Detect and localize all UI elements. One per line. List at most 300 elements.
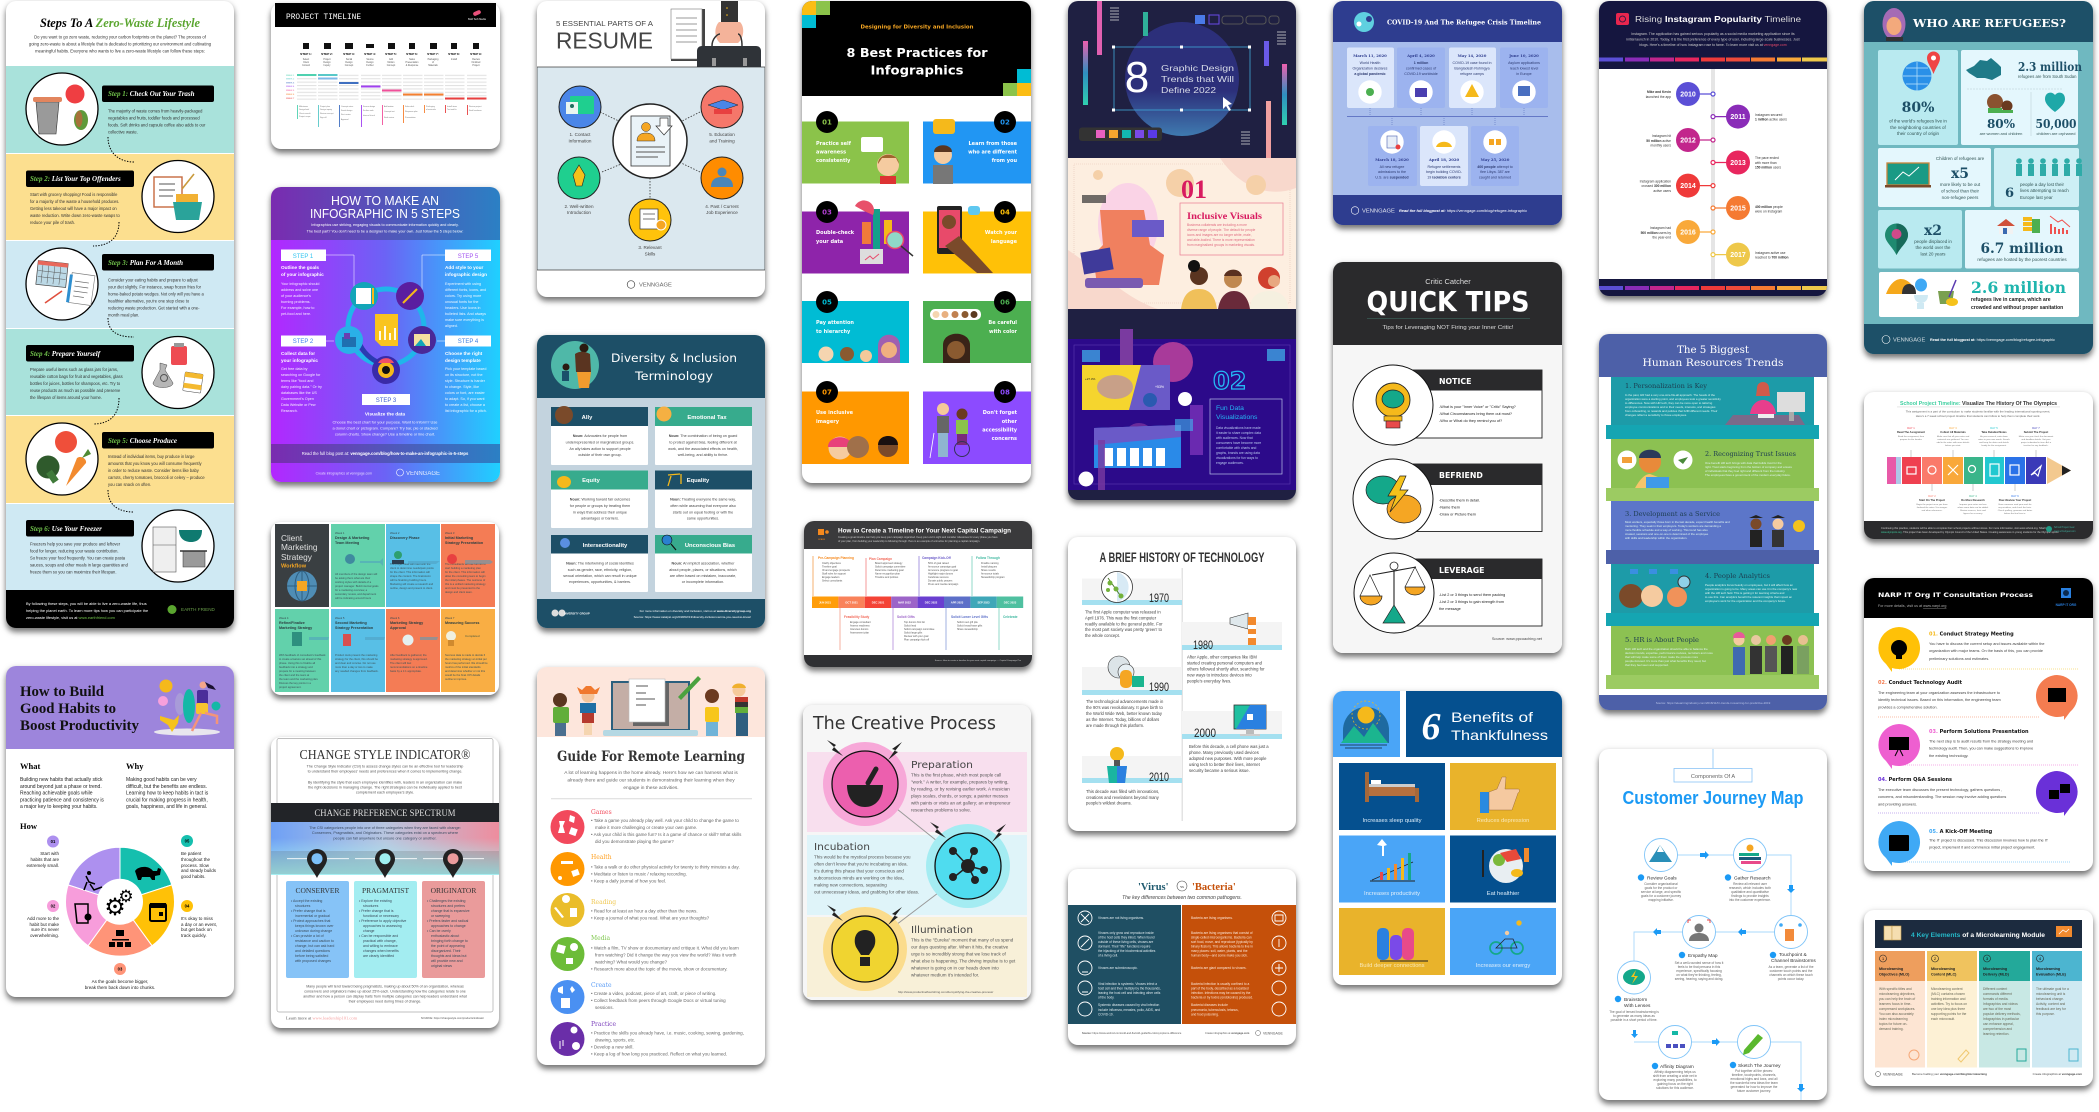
panel: NARP consultation process: provides a comprehensive solution. bbox=[1878, 706, 1938, 710]
panel: diversity and inclusion bbox=[537, 335, 765, 628]
step circles bbox=[26, 73, 214, 582]
title: Terminology bbox=[634, 369, 713, 383]
comparison text: host cell and then multiply by the thousands, bbox=[1098, 986, 1161, 990]
practice labels: language bbox=[991, 239, 1018, 245]
term cards: Noun: An implicit association, whether bbox=[672, 562, 735, 566]
year nodes bbox=[1688, 92, 1738, 257]
week cards: to create a feature set ahead of this bbox=[279, 657, 322, 661]
stat text: the neighboring countries of bbox=[1890, 125, 1947, 130]
activity lists: • Meditate or listen to music / relaxing recording. bbox=[591, 872, 687, 876]
columns: Evaluation (MLE) bbox=[2036, 972, 2067, 976]
category boxes: • Prefers faster and radical bbox=[427, 919, 469, 923]
title: The best part? You don't need to be a designer to make your own. Just follow the 5 steps below: bbox=[307, 230, 463, 234]
title: HOW TO MAKE AN bbox=[331, 193, 439, 208]
day notes: As you research, write down bbox=[1980, 435, 2009, 438]
comparison text: of the host cells they infect. When found bbox=[1098, 936, 1155, 940]
stat boxes bbox=[1878, 50, 2079, 317]
category boxes: • Explore the existing bbox=[359, 899, 392, 903]
milestone notes: of materials bbox=[426, 108, 436, 111]
panel: creative process: whatever is going on in our heads down into bbox=[911, 966, 999, 970]
panel: resume bbox=[537, 1, 765, 297]
step body text: bottles for juices, bottles for shampoos, etc. Try to bbox=[30, 381, 121, 386]
gantt grid: WEEK 1 bbox=[286, 75, 295, 77]
panel: creative process: This is the first phase, which most people call bbox=[911, 772, 1001, 778]
step text: Research. bbox=[281, 409, 298, 413]
panel: instagram timeline: 2011 bbox=[1730, 114, 1746, 121]
columns: Activity, content and bbox=[2036, 1002, 2065, 1006]
step text: Your infographic should bbox=[281, 282, 319, 286]
category boxes: and willing to embrace bbox=[363, 944, 398, 948]
step labels: into the customer experience. bbox=[1729, 898, 1771, 902]
milestone notes: Response plan bbox=[405, 111, 418, 113]
day notes: DAY 6 bbox=[2011, 494, 2019, 498]
panel: instagram timeline: 2016 bbox=[1680, 230, 1696, 236]
week cards: phase. Using this to finalize all bbox=[279, 661, 316, 665]
columns: each microvault. bbox=[1931, 1017, 1955, 1021]
week cards: Team Meeting bbox=[335, 541, 359, 545]
step columns: STEP 4: bbox=[364, 52, 376, 56]
step labels: Brainstorm bbox=[1624, 997, 1647, 1003]
phases: Timeline goal bbox=[822, 566, 837, 568]
step body text: Prepare useful items such as glass jars for jams, bbox=[30, 367, 118, 372]
activity lists: • Ask your child is this game fun? Is it a game of chance or skill? What skills bbox=[591, 832, 742, 837]
header bbox=[1882, 8, 2066, 41]
step text: style. Structure is harder bbox=[445, 379, 486, 383]
milestone notes: Design inquiry bbox=[320, 108, 332, 111]
term cards: Noun: Advocates for people from bbox=[573, 434, 627, 438]
header: COVID-19 And The Refugee Crisis Timeline bbox=[1387, 18, 1541, 26]
event text: June 10, 2020 bbox=[1508, 53, 1539, 58]
milestone notes: Review project bbox=[469, 105, 482, 108]
week cards: design and client team. bbox=[445, 590, 473, 594]
step text: headers. Use icons in bbox=[445, 306, 480, 310]
title: 8 Best Practices for bbox=[846, 45, 988, 60]
step text: databases like the US bbox=[281, 391, 317, 395]
panel: creative process: "work." A writer, for example, prepares by writing, bbox=[911, 780, 1008, 784]
step text: different fonts, icons, and bbox=[445, 288, 486, 292]
columns: (MLC) contains chosen bbox=[1931, 992, 1965, 996]
why: Why bbox=[126, 761, 144, 771]
event text: 19 isolation centers bbox=[1427, 176, 1461, 180]
gantt grid bbox=[286, 74, 486, 100]
step text: Experiment with using bbox=[445, 282, 481, 286]
step body text: home-baked potato wedges. Not only will you have a bbox=[108, 292, 205, 296]
step body text: reusable cotton bags for fruit and vegetables, glass bbox=[30, 374, 123, 379]
comparison text: Viral infection is systemic. Viruses infect a bbox=[1098, 982, 1157, 986]
title: Benefits of bbox=[1451, 709, 1533, 725]
step text: pet-food and here. bbox=[281, 312, 311, 316]
step labels: the wonderful new ideas the team bbox=[1730, 1081, 1778, 1085]
footer bbox=[552, 609, 751, 619]
era text: This decade was filled with innovations, bbox=[1086, 789, 1159, 794]
panel: HR trends: to use this. Can analytics benefit the relevant insights that impact an bbox=[1705, 595, 1792, 599]
part icons bbox=[558, 86, 743, 241]
year notes: were on Instagram bbox=[1755, 210, 1783, 214]
practice labels: consistently bbox=[816, 158, 851, 164]
practice labels bbox=[816, 141, 1018, 442]
phases: Celebrate success bbox=[928, 576, 949, 579]
number badges: 02 bbox=[1000, 118, 1010, 126]
title: 5 ESSENTIAL PARTS OF A bbox=[556, 21, 653, 28]
week cards: After feedback is gathered, the bbox=[390, 653, 427, 657]
category boxes bbox=[286, 881, 485, 978]
panel: HR trends: employee communications and to their needs, interests, and strategies bbox=[1625, 405, 1716, 409]
columns: 4 bbox=[2039, 957, 2041, 961]
activity lists: • Take a walk or do other physical activity for twenty to thirty minutes a day. bbox=[591, 864, 740, 870]
stat text: lives attempting to reach bbox=[2020, 188, 2069, 193]
week cards: Week 7 bbox=[445, 616, 455, 620]
step text: list infographic for a pitch. bbox=[445, 409, 487, 413]
panel: creative process: This is the "Eureka" moment that many of us spend bbox=[911, 938, 1014, 942]
footer: www.schoolgear.com bbox=[2054, 530, 2076, 533]
panel: creative process bbox=[803, 705, 1031, 1000]
term cards: An ally takes action to support people bbox=[569, 447, 631, 451]
step text: Get free data by bbox=[281, 367, 308, 371]
milestone notes: Presentation bbox=[405, 116, 416, 119]
footer: Continuing this practice, students will be able to complete their school projects without stress. For more information, visit www.school.org. Sharing is bbox=[1881, 526, 2051, 530]
practice labels: to hierarchy bbox=[816, 329, 851, 335]
footer: Create infographics at venngage.com bbox=[2033, 1072, 2082, 1076]
heading bbox=[1622, 749, 1804, 808]
stat text: x2 bbox=[1924, 223, 1942, 239]
step text: a donut chart or pictogram. Compare? Try bar, pie or stacked bbox=[332, 426, 438, 430]
data visualizations section: Visualizations bbox=[1216, 414, 1258, 421]
panel: HR trends: changes reflect a sensitivity to those employees. bbox=[1625, 413, 1687, 417]
flow path bbox=[1634, 855, 1801, 1100]
step body text: Instead of individual items, buy produce in large bbox=[108, 454, 195, 459]
tip boxes: the message bbox=[1439, 607, 1461, 611]
logo: earth friend bbox=[168, 605, 216, 614]
step text: to change. Style, like bbox=[445, 385, 479, 389]
step columns: Design bbox=[366, 62, 374, 64]
event text: COVID-19 case found in bbox=[1453, 61, 1491, 65]
phases: Feasibility Study bbox=[844, 615, 870, 619]
title: Critic Catcher bbox=[1425, 277, 1471, 286]
step labels: points occur today. bbox=[1778, 977, 1804, 981]
practice labels: Be careful bbox=[988, 320, 1017, 326]
phases: Solicit campaign committee bbox=[875, 566, 906, 568]
category boxes: bringing forth change to bbox=[431, 939, 468, 943]
panel: instagram timeline: 2013 bbox=[1730, 160, 1746, 167]
week cards: Week 6 bbox=[390, 616, 400, 620]
footer bbox=[1351, 207, 1527, 214]
stat text: refugees are from South Sudan bbox=[2018, 74, 2077, 79]
day notes: Read The Assignment bbox=[1897, 430, 1925, 434]
week cards: strategy for the client, this should be bbox=[335, 657, 379, 661]
columns bbox=[1875, 951, 2082, 1068]
panel: HR trends: employee's work for the organization and the company's future. bbox=[1705, 599, 1786, 603]
phases: ID and engage prospects bbox=[822, 569, 851, 572]
columns: Delivery (MLD) bbox=[1983, 972, 2010, 976]
category boxes: • Can be overly bbox=[427, 929, 451, 933]
intro: This assignment is a part of the curriculum to make students familiar with the leading international sporting event. bbox=[1906, 410, 2050, 414]
day notes: DAY 2 bbox=[1928, 494, 1936, 498]
step columns: STEP 3: bbox=[343, 52, 355, 56]
runner illustration bbox=[154, 680, 220, 736]
hero title: Trends that Will bbox=[1161, 75, 1234, 84]
category boxes: • Can provide a lot of bbox=[291, 934, 324, 938]
title: The 5 Biggest bbox=[1677, 345, 1749, 356]
term cards: Noun: The intertwining of social identities bbox=[566, 562, 634, 566]
habit notes: overwhelming. bbox=[30, 933, 59, 938]
step text: infographic design bbox=[445, 272, 487, 277]
phases: 50% of goal raised bbox=[928, 562, 949, 565]
data visualizations section: Data visualizations have made bbox=[1216, 426, 1261, 430]
data visualizations section: with audiences. Now that bbox=[1216, 436, 1253, 440]
panel: NARP consultation process: The next step is to audit results from the strategy meeting and bbox=[1929, 740, 2033, 744]
intro: already there and guide our students in demonstrating their learning when they bbox=[567, 778, 735, 784]
inclusive visuals section: and able-bodied. There is more representation bbox=[1187, 238, 1255, 242]
columns: With specific titles and bbox=[1879, 987, 1912, 991]
panel: virus vs bacteria: The key differences between two common pathogens. bbox=[1122, 895, 1242, 901]
panel: virus vs bacteria: and food poisoning. bbox=[1191, 1012, 1219, 1016]
panel: HR trends: that they feel seen and supported. bbox=[1625, 663, 1669, 667]
practice labels: Double-check bbox=[816, 230, 855, 236]
header: WHO ARE REFUGEES? bbox=[1912, 16, 2066, 30]
columns: Microlearning bbox=[1879, 967, 1903, 971]
footer text: VENNGAGE bbox=[406, 471, 440, 477]
year notes: crossed 300 million bbox=[1641, 184, 1671, 188]
colored stripes bbox=[1599, 58, 1827, 290]
event text bbox=[1353, 53, 1540, 180]
footer text: Read the full blog post at: venngage.com/blog/how-to-make-an-infographic-in-5-steps bbox=[302, 451, 469, 456]
step columns: Review bbox=[472, 59, 480, 61]
panel: quick tips bbox=[1333, 262, 1562, 653]
how heading: How bbox=[20, 821, 38, 831]
event text: March 18, 2020 bbox=[1375, 157, 1409, 162]
step body text: Consider your eating habits and prepare to adjust bbox=[108, 278, 199, 282]
habit notes: a day or an event, bbox=[181, 922, 217, 927]
day notes: and keep the dates and details bbox=[1979, 441, 2010, 444]
tip boxes: -What Circumstances bring them out most? bbox=[1439, 412, 1512, 416]
panel: virus vs bacteria: sort food, move, and reproduce (typically by bbox=[1191, 940, 1253, 944]
day notes: Peer-Review Your Project bbox=[1999, 498, 2031, 502]
category boxes: original views bbox=[431, 964, 452, 968]
panel: creative process: out unnecessary ideas, and grabbing for other ideas. bbox=[814, 890, 919, 894]
era text: people's wildest dreams. bbox=[1086, 800, 1132, 806]
panel: creative process: often don't know that you're incubating an idea. bbox=[814, 862, 908, 866]
workflow title: Client bbox=[281, 533, 303, 543]
year notes: Instagram secured bbox=[1755, 113, 1782, 117]
event text: 1 million bbox=[1414, 61, 1428, 65]
week cards: the team and the marketing plan. bbox=[279, 677, 319, 681]
intro bbox=[564, 770, 738, 791]
panel: remote learning guide bbox=[537, 667, 765, 1065]
panel: HR trends: from onboarding, to rewards and policies that fulfill different needs. Their bbox=[1625, 409, 1717, 413]
category boxes: practical with change, bbox=[363, 939, 397, 943]
milestone notes: Test and fix bbox=[447, 108, 457, 111]
category boxes: change, but can ask hard bbox=[295, 944, 334, 948]
benefit tiles: Reduces depression bbox=[1477, 818, 1529, 824]
footer: VENNGAGE bbox=[1362, 208, 1395, 214]
footer text bbox=[26, 601, 148, 620]
step text bbox=[1878, 632, 2029, 835]
week cards: prepare for a meeting between bbox=[279, 669, 316, 673]
tip icons bbox=[1360, 383, 1425, 623]
week cards: more than a day or two to make bbox=[335, 665, 373, 669]
panel: NARP consultation process: project, implement it and commence initial project engagement. bbox=[1929, 846, 2035, 850]
era years: 2000 bbox=[1194, 726, 1216, 740]
panel: creative process: with paints or visits an art gallery; an entrepreneur bbox=[911, 800, 1011, 806]
week cards: any needed changes from feedback. bbox=[335, 669, 379, 673]
number badges: 07 bbox=[822, 388, 832, 396]
step text: 01. Conduct Strategy Meeting bbox=[1929, 632, 2014, 638]
step body text: So freeze your food frequently. You can create pasta bbox=[30, 556, 126, 560]
footer text: Create infographics at venngage.com bbox=[316, 472, 372, 476]
cycle diagram bbox=[326, 255, 445, 384]
panel: good habits bbox=[6, 666, 234, 997]
step body text: sauces, soups and other meals in large quantities and bbox=[30, 562, 129, 568]
panel: virus vs bacteria: Bacteria are living organisms. bbox=[1191, 916, 1233, 920]
step labels: feels to be that persona in this bbox=[1678, 965, 1721, 969]
phases: Announce campaign goal bbox=[928, 566, 957, 568]
header bbox=[818, 528, 1011, 543]
category boxes: changes when benefits bbox=[363, 949, 399, 953]
trend text: 1. Personalization is Key bbox=[1625, 383, 1708, 390]
title: Boost Productivity bbox=[20, 718, 139, 734]
event text: confirmed cases of bbox=[1406, 66, 1436, 70]
gantt grid: WEEK 7 bbox=[286, 98, 295, 100]
closing text: Many people will tend toward being pragmatists, making up about 50% of an organization, whereas bbox=[306, 984, 464, 988]
activity lists: • Practice the skills you already have, i.e. music, cooking, sewing, gardening, bbox=[591, 1030, 744, 1036]
era text: phone. Many previously used devices bbox=[1189, 750, 1259, 755]
milestone notes: Final handover bbox=[469, 109, 482, 112]
week cards: start building a marketing plan bbox=[445, 566, 481, 570]
activity lists: sessions. bbox=[595, 1005, 614, 1010]
habit notes: throughout the bbox=[181, 857, 211, 862]
title: Good Habits to bbox=[20, 701, 116, 717]
step body text: vegetables and fruits, toddler foods and processed bbox=[108, 116, 200, 120]
intro: By identifying the style that each employee identifies with, leaders in an organization can make bbox=[308, 780, 462, 784]
stat text: refugees are hosted by the poorest countries bbox=[1977, 257, 2067, 262]
footer bbox=[1881, 526, 2076, 534]
category boxes: or sweeping bbox=[431, 914, 450, 918]
panel: graphic design trends bbox=[1068, 1, 1296, 500]
intro text bbox=[29, 34, 212, 54]
step labels: shift from creating a wide net in bbox=[1653, 1074, 1697, 1078]
day notes: notes in your own words. Search bbox=[1978, 438, 2011, 441]
era text: security became a serious issue. bbox=[1189, 768, 1250, 773]
comparison text: include influenza, measles, polio, AIDS, and bbox=[1098, 1008, 1160, 1012]
panel: school project timeline bbox=[1864, 392, 2093, 539]
panel: NARP consultation process: concerns, and misunderstanding. The session may involve adding questions bbox=[1878, 795, 2006, 799]
category boxes: • Prefer change that is bbox=[291, 909, 326, 913]
source line: SOURCE: https://changestyle.com/products/indicator bbox=[421, 1016, 484, 1020]
title: 'Virus' bbox=[1138, 882, 1169, 893]
timeline bar: DEC 2022 bbox=[925, 600, 938, 604]
logo bbox=[468, 9, 486, 21]
activity lists: • Create a video, podcast, piece of art, craft, or piece of writing. bbox=[591, 991, 716, 996]
panel: HR trends: right. Trust starts beginning from the bottom of company and ensure bbox=[1705, 465, 1792, 469]
step body text: foods. Soft drinks and capsule coffee also adds to our bbox=[108, 122, 206, 128]
title: Diversity & Inclusion bbox=[611, 351, 737, 365]
hero illustration bbox=[1079, 1, 1287, 158]
panel: NARP consultation process: The IT project is discussed. This discussion involves how to plan the IT bbox=[1929, 838, 2049, 842]
era text: The technological advancements made in bbox=[1086, 699, 1164, 704]
practice labels: awareness bbox=[816, 150, 846, 156]
step labels: seeing, hearing, saying and doing. bbox=[1675, 977, 1723, 981]
term cards: Emotional Tax bbox=[687, 415, 727, 421]
source footer bbox=[1082, 1030, 1284, 1036]
step text: your infographic bbox=[281, 358, 318, 363]
practice labels: your data bbox=[816, 239, 843, 245]
panel: creative process: This would be the mystical process because you bbox=[814, 854, 911, 860]
week cards: Initial Marketing bbox=[445, 536, 473, 540]
activity lists: • Develop a new skill. bbox=[591, 1044, 634, 1050]
columns: Infographics in particular bbox=[1983, 1017, 2020, 1021]
step columns: Design bbox=[323, 62, 331, 64]
step labels: exploring many possibilities, to bbox=[1653, 1078, 1697, 1082]
panel: how to make an infographic: STEP 3 bbox=[376, 398, 397, 404]
term cards: such as gender, race, ethnicity, religion, bbox=[568, 568, 632, 572]
intro: the right decisions in managing change. The right strategies can be individually applied to best bbox=[308, 786, 462, 790]
what: Building new habits that actually stick bbox=[20, 777, 103, 783]
phases: Name recognition plan bbox=[875, 572, 901, 576]
panel: zero-waste steps: Step 6: Use Your Freezer bbox=[30, 525, 102, 533]
milestone notes: Concept test bbox=[384, 110, 395, 113]
tip boxes: -Name them bbox=[1439, 506, 1460, 510]
day notes: DAY 5 bbox=[1990, 426, 1998, 430]
columns: Different content bbox=[1983, 987, 2007, 991]
step labels: As a team, generate a list of the bbox=[1768, 965, 1814, 969]
week cards: for the client. This information will bbox=[390, 570, 430, 574]
part labels: 4. Past / Current bbox=[705, 204, 739, 209]
step text: colors. Try using more bbox=[445, 294, 481, 298]
workflow title bbox=[281, 533, 318, 601]
comparison text: Viruses only grow and reproduce inside bbox=[1098, 931, 1154, 935]
day notes: DAY 1 bbox=[1907, 426, 1915, 430]
step labels: Empathy Map bbox=[1688, 953, 1718, 959]
flow arrows bbox=[1631, 851, 1805, 1092]
milestone notes: Review concept bbox=[320, 112, 334, 115]
era text: After Apple, other companies like IBM bbox=[1187, 654, 1257, 660]
practice labels: other bbox=[1002, 419, 1018, 425]
term cards: advantages or barriers. bbox=[581, 516, 619, 520]
step labels: qualitative and quantitative bbox=[1731, 890, 1769, 894]
panel: virus vs bacteria: pneumonia, tuberculosis, tetanus, bbox=[1191, 1008, 1239, 1012]
phases: Assessment plan bbox=[850, 632, 870, 634]
activity headings: Practice bbox=[591, 1021, 617, 1028]
tip boxes: -Draw or Picture them bbox=[1439, 512, 1476, 516]
week cards: Week 3 bbox=[445, 531, 455, 535]
intro: Here's a 7-week school project timeline that students can follow to help them complete their work. bbox=[1916, 414, 2040, 418]
columns: one key idea plus three bbox=[1931, 1007, 1965, 1011]
step body text: amounts that you know you will consume frequently bbox=[108, 461, 202, 466]
panel: HR trends: of individuals that they feel right and different from the industry. bbox=[1705, 469, 1785, 473]
era text: the 90's was revolutionary. It gave birth to bbox=[1086, 705, 1164, 710]
panel: virus vs bacteria: human body—and some make you sick. bbox=[1191, 954, 1248, 958]
habit notes: Start with bbox=[40, 851, 59, 856]
category boxes: • Prefer change that is bbox=[359, 909, 394, 913]
panel: instagram timeline: 2014 bbox=[1680, 183, 1696, 190]
stat text: people a day lost their bbox=[2020, 182, 2065, 187]
columns: learning retention. bbox=[1983, 1032, 2009, 1036]
category boxes: structures bbox=[295, 904, 311, 908]
panel: creative process: whatever medium it's intended for. bbox=[911, 972, 979, 978]
era bands bbox=[1082, 578, 1282, 783]
columns: commands different bbox=[1983, 992, 2012, 996]
process text bbox=[814, 760, 973, 936]
panel: HR trends: that will help make some of them make the process more bbox=[1625, 655, 1698, 659]
milestone notes: Social design bbox=[341, 110, 352, 112]
gantt grid: WEEK 4 bbox=[286, 86, 295, 88]
step labels: Affinity Diagram bbox=[1660, 1064, 1694, 1070]
number badges bbox=[816, 111, 1016, 403]
phases: Plan campaign kick-off bbox=[904, 638, 929, 642]
term cards: Noun: The combination of being on guard bbox=[669, 434, 737, 438]
day notes: and other references. bbox=[1922, 509, 1943, 512]
event text: Organization declares bbox=[1353, 66, 1388, 70]
